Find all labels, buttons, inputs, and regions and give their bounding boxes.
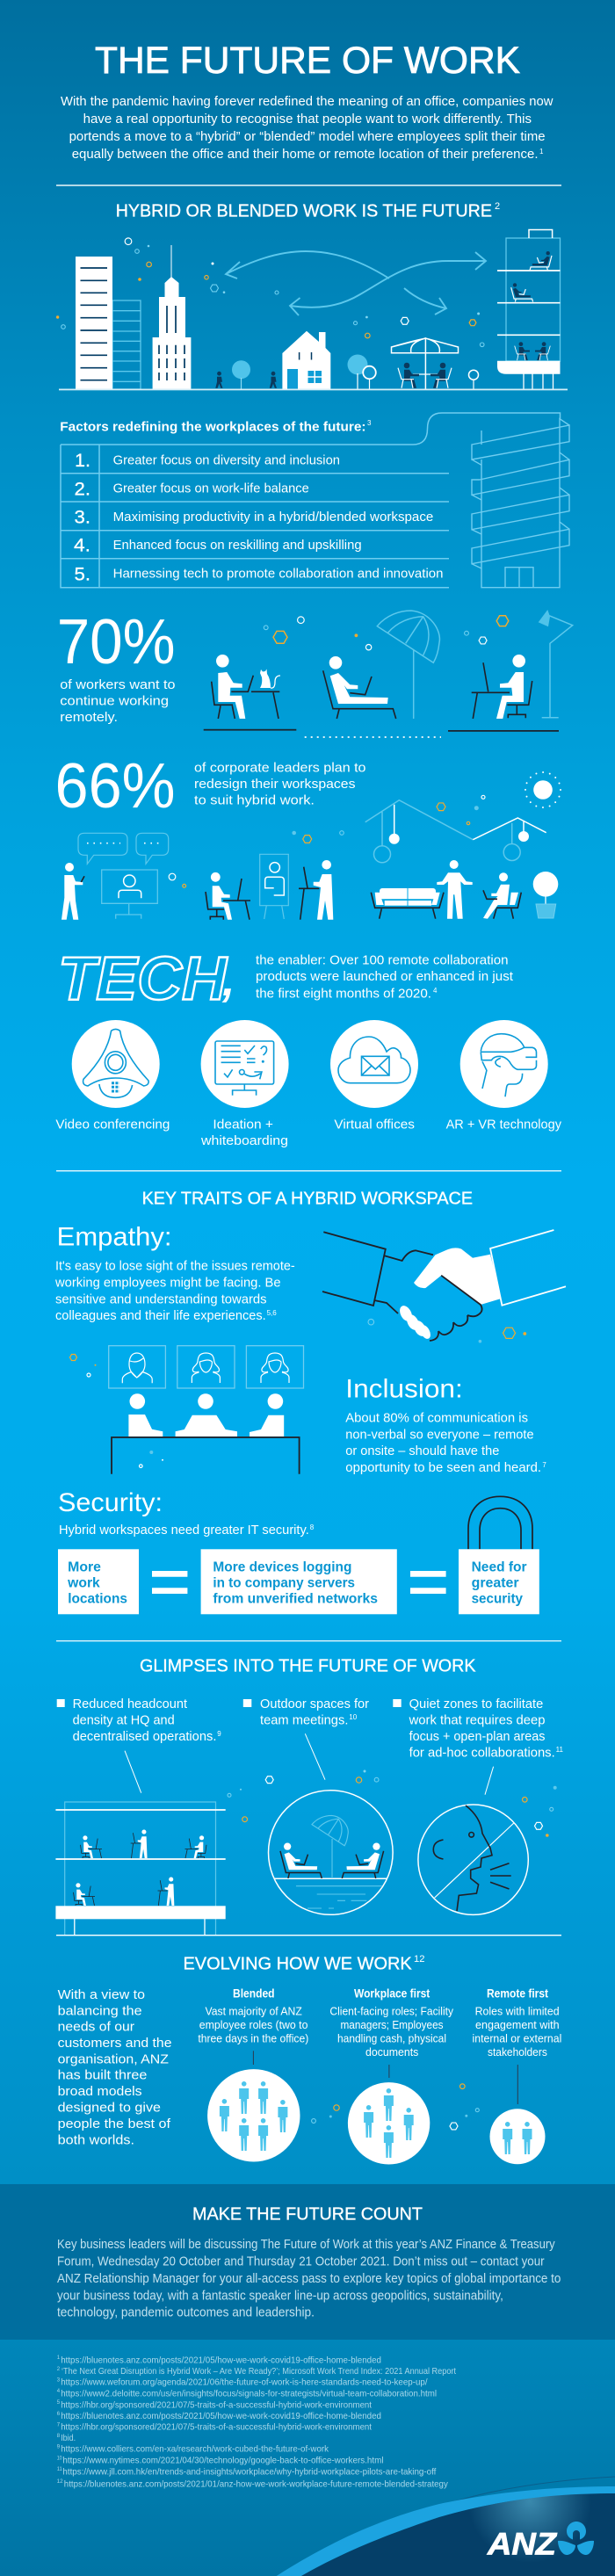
heading: hybrid or blended work: 2 <box>495 201 500 212</box>
text: empathy: Empathy: <box>57 1223 172 1252</box>
text: inclusion: opportunity to be seen and heard. <box>345 1460 541 1475</box>
bullet: outdoor spaces: Outdoor spaces for <box>260 1697 369 1711</box>
footnotes: 12 <box>57 2479 63 2485</box>
text: intro to models: organisation, ANZ <box>58 2051 169 2066</box>
illustration: redesigned workspace <box>62 772 561 920</box>
equals sign <box>410 1571 446 1594</box>
factor 3: 3. <box>74 508 90 528</box>
box: need for greater security: Need for <box>472 1560 527 1575</box>
text: intro to models: designed to give <box>58 2101 161 2116</box>
factor 4: Enhanced focus on reskilling and upskilling <box>113 538 362 553</box>
bullet: reduced headcount: 9 <box>217 1730 221 1738</box>
illustration: outdoor meeting circle <box>269 1791 393 1914</box>
tech heading word: TECH <box>58 944 228 1013</box>
text: empathy <box>54 1223 295 1323</box>
footnotes: https://hbr.org/sponsored/2021/07/5-traits-of-a-successful-hybrid-work-environment <box>61 2399 372 2410</box>
model: remote first: Remote first <box>487 1986 548 2000</box>
panel: factors <box>60 413 569 588</box>
speech bubbles <box>78 833 169 864</box>
box: more devices <box>201 1549 397 1614</box>
model: workplace first: Workplace first <box>354 1986 430 2000</box>
seated person <box>206 872 250 920</box>
heading: key traits: KEY TRAITS OF A HYBRID WORKSPACE <box>142 1190 473 1209</box>
footnotes: ‘The Next Great Disruption is Hybrid Work – Are We Ready?’; Microsoft Work Trend Index: 2021 Annual Report <box>62 2366 456 2377</box>
footnotes: 1 <box>57 2355 61 2361</box>
factor 2: 2. <box>74 479 90 499</box>
person with phone <box>62 863 84 920</box>
seated person with laptop <box>483 872 521 919</box>
box: more work locations <box>58 1549 139 1614</box>
stat: 70%: continue working <box>60 694 169 709</box>
worker on lounger <box>323 611 439 719</box>
model: remote first: internal or external <box>473 2032 561 2045</box>
bullet: outdoor spaces: 10 <box>349 1713 358 1721</box>
particles <box>264 616 509 650</box>
factor 3: Maximising productivity in a hybrid/blended workspace <box>113 510 433 525</box>
icon labels <box>55 1117 561 1148</box>
arrows <box>226 251 486 315</box>
bullet: quiet zones <box>393 1697 563 1760</box>
factor 5: 5. <box>74 564 90 584</box>
text: intro to models: people the best of <box>58 2117 171 2131</box>
office block <box>76 257 141 389</box>
intro text block <box>61 94 554 162</box>
bullet: reduced headcount: Reduced headcount <box>73 1697 188 1711</box>
factors heading: 3 <box>367 419 372 427</box>
particles <box>169 795 485 887</box>
model: remote first: Roles with limited <box>475 2004 560 2017</box>
illustration: inclusive meeting <box>70 1346 304 1474</box>
worker with lamp <box>472 610 573 719</box>
text: inclusion <box>345 1375 546 1475</box>
intro text block: 1 <box>539 148 544 156</box>
worker with cat <box>212 655 280 719</box>
spiral building <box>472 419 569 588</box>
particles <box>312 2084 479 2130</box>
footer background <box>0 2340 615 2576</box>
factor 4 <box>74 536 362 556</box>
text: security: Hybrid workspaces need greater IT security. <box>59 1523 309 1538</box>
stat: 66%: of corporate leaders plan to <box>194 760 365 775</box>
box: more work locations: locations <box>68 1591 127 1606</box>
factors table lines <box>61 413 561 588</box>
house <box>282 331 330 389</box>
factor 2 <box>74 479 309 499</box>
text: intro to models: With a view to <box>58 1987 145 2002</box>
footnotes: 7 <box>57 2423 61 2428</box>
text: empathy: colleagues and their life experiences. <box>55 1308 266 1323</box>
couch <box>371 888 444 919</box>
panel paragraph: technology, pandemic outcomes and leadership. <box>57 2306 315 2320</box>
stat: 70%: 70% <box>57 607 176 677</box>
factor 1: Greater focus on diversity and inclusion <box>113 452 340 467</box>
text: security <box>58 1488 315 1538</box>
text: intro to models: customers and the <box>58 2036 171 2051</box>
intro text block: portends a move to a “hybrid” or “blended” model where employees split their time <box>69 129 546 144</box>
bullet: quiet zones: Quiet zones to facilitate <box>409 1697 543 1711</box>
factors heading: Factors redefining the workplaces of the future: <box>60 420 366 435</box>
panel paragraph: Forum, Wednesday 20 October and Thursday 21 October 2021. Don’t miss out – contact your <box>57 2254 545 2268</box>
intro text block: have a real opportunity to recognise that people want to work differently. This <box>83 112 532 127</box>
text: intro to models <box>58 1987 171 2147</box>
text: empathy: sensitive and understanding towards <box>55 1292 267 1306</box>
box: more work locations: work <box>67 1576 100 1591</box>
icon: whiteboard <box>201 1020 289 1108</box>
model: remote first: stakeholders <box>488 2045 547 2059</box>
meeting participants <box>128 1393 284 1436</box>
footnotes: https://www.jll.com.hk/en/trends-and-insights/workplace/why-hybrid-workplace-pilots-are-taking-off <box>62 2466 436 2477</box>
footnotes: 2 <box>57 2367 61 2372</box>
footnotes: https://bluenotes.anz.com/posts/2021/01/anz-how-we-work-workplace-future-remote-blended-strategy <box>64 2479 448 2490</box>
pointer lines <box>125 1733 494 1795</box>
model: remote first <box>473 1986 561 2164</box>
text: intro to models: broad models <box>58 2084 142 2099</box>
factor 1 <box>75 451 340 471</box>
bullet: outdoor spaces <box>243 1697 369 1728</box>
tech text: the first eight months of 2020. <box>256 987 431 1002</box>
stat: 66% <box>54 751 365 821</box>
footnotes: https://hbr.org/sponsored/2021/07/5-traits-of-a-successful-hybrid-work-environment <box>61 2422 372 2433</box>
icon: handshake <box>322 1230 566 1342</box>
box: more devices: More devices logging <box>213 1560 351 1575</box>
title: THE FUTURE OF WORK <box>95 40 520 82</box>
illustration: quiet zone circle <box>418 1805 528 1914</box>
heading: evolving: EVOLVING HOW WE WORK <box>183 1955 412 1974</box>
text: security: 8 <box>310 1523 315 1531</box>
swoosh <box>277 2477 615 2576</box>
footnotes <box>57 2355 456 2490</box>
footnotes: https://www.weforum.org/agenda/2021/06/the-future-of-work-is-here-standards-need-to-keep-up/ <box>61 2377 428 2388</box>
factor 4: 4. <box>74 536 90 556</box>
box: need for greater security: greater <box>472 1576 519 1591</box>
footnotes: 4 <box>57 2389 61 2394</box>
box: more work locations: More <box>68 1560 101 1575</box>
tech text <box>256 952 514 1002</box>
logo: ANZ: ANZ <box>487 2527 558 2561</box>
footnotes: 3 <box>57 2377 61 2383</box>
text: empathy: 5,6 <box>267 1309 277 1317</box>
panel paragraph: ANZ Relationship Manager for your all-access pass to explore key topics of global importance to <box>57 2272 561 2286</box>
floor lines <box>204 729 559 737</box>
intro text block: With the pandemic having forever redefined the meaning of an office, companies now <box>61 94 554 109</box>
panel paragraph: Key business leaders will be discussing The Future of Work at this year’s ANZ Finance & Treasury <box>57 2238 555 2252</box>
footnotes: https://bluenotes.anz.com/posts/2021/05/how-we-work-covid19-office-home-blended <box>61 2355 381 2365</box>
model: blended: Blended <box>233 1986 274 2000</box>
stat: 66%: 66% <box>54 751 176 821</box>
text: intro to models: has built three <box>58 2068 147 2083</box>
bullet: outdoor spaces: team meetings. <box>260 1713 348 1728</box>
standing person at desk <box>299 860 333 920</box>
stat: 70%: of workers want to <box>60 677 176 692</box>
particles <box>228 1769 557 1837</box>
icon labels: Video conferencing <box>55 1117 170 1132</box>
model: remote first: engagement with <box>475 2018 560 2031</box>
footnotes: Ibid. <box>61 2433 76 2443</box>
text: security: Security: <box>58 1488 163 1517</box>
intro text block: equally between the office and their home or remote location of their preference. <box>72 147 538 162</box>
bullet: reduced headcount <box>57 1697 221 1744</box>
hexagon particles <box>56 238 484 347</box>
text: intro to models: both worlds. <box>58 2132 134 2147</box>
footnotes: 10 <box>57 2457 62 2462</box>
icon: video conferencing <box>72 1020 160 1108</box>
security equation <box>58 1549 539 1614</box>
tech text: the enabler: Over 100 remote collaboration <box>256 952 509 967</box>
text: inclusion: About 80% of communication is <box>345 1410 528 1425</box>
panel paragraph <box>57 2238 561 2320</box>
panel paragraph: your business today, with a fantastic speaker line-up across geopolitics, sustainability, <box>57 2289 503 2303</box>
logo: ANZ <box>487 2522 594 2561</box>
remote avatars <box>122 1353 289 1383</box>
model: workplace first: documents <box>365 2045 419 2059</box>
footnotes: https://bluenotes.anz.com/posts/2021/05/how-we-work-covid19-office-home-blended <box>61 2411 381 2421</box>
icon labels: AR + VR technology <box>446 1117 561 1132</box>
footnotes: 11 <box>57 2467 62 2472</box>
text: inclusion: Inclusion: <box>345 1375 463 1404</box>
heading: hybrid or blended work: HYBRID OR BLENDED WORK IS THE FUTURE <box>116 202 492 221</box>
factor 3 <box>74 508 433 528</box>
box: need for greater security <box>459 1549 539 1614</box>
factor 1: 1. <box>75 451 90 471</box>
ground <box>59 388 568 390</box>
table <box>112 1437 300 1474</box>
text: intro to models: needs of our <box>58 2020 134 2035</box>
model: blended <box>198 1986 308 2161</box>
icon: VR headset <box>460 1020 548 1108</box>
particles <box>70 1355 163 1467</box>
footnotes: 8 <box>57 2434 61 2439</box>
icon labels: Virtual offices <box>334 1117 415 1132</box>
text: intro to models: balancing the <box>58 2003 142 2018</box>
icon labels: whiteboarding <box>200 1133 288 1148</box>
stat: 66%: to suit hybrid work. <box>194 792 315 807</box>
tech heading word: , <box>221 955 235 1006</box>
apartment tower <box>497 230 561 389</box>
footnotes: 6 <box>57 2412 61 2417</box>
panel heading: MAKE THE FUTURE COUNT <box>192 2205 423 2225</box>
bullet: reduced headcount: decentralised operations. <box>73 1729 216 1744</box>
bullet: reduced headcount: density at HQ and <box>73 1713 175 1728</box>
potted plant <box>533 872 558 918</box>
box: more devices: in to company servers <box>213 1576 355 1591</box>
skyscraper <box>153 245 191 389</box>
model: workplace first <box>329 1986 453 2165</box>
text: empathy: working employees might be facing. Be <box>54 1276 281 1291</box>
footnotes: https://www.colliers.com/en-xa/research/work-cubed-the-future-of-work <box>61 2444 329 2455</box>
standing person <box>437 860 473 919</box>
stat: 70%: remotely. <box>60 710 118 725</box>
logo mark <box>558 2522 594 2555</box>
screens <box>109 1346 304 1388</box>
heading: glimpses: GLIMPSES INTO THE FUTURE OF WORK <box>140 1657 476 1676</box>
bullet: quiet zones: work that requires deep <box>409 1713 545 1728</box>
heading: evolving: 12 <box>414 1954 425 1965</box>
roof and lamps <box>365 800 546 863</box>
model: workplace first: managers; Employees <box>341 2018 444 2031</box>
text: inclusion: or onsite – should have the <box>345 1444 499 1458</box>
stat: 66%: redesign their workspaces <box>194 777 355 792</box>
illustration: low density office <box>55 1802 226 1936</box>
bullet: quiet zones: focus + open-plan areas <box>409 1729 545 1744</box>
box: more devices: from unverified networks <box>213 1591 378 1606</box>
tech text: products were launched or enhanced in just <box>256 969 514 984</box>
text: inclusion: non-verbal so everyone – remote <box>345 1427 534 1442</box>
walkers <box>215 372 277 388</box>
model: workplace first: handling cash, physical <box>337 2032 446 2045</box>
footnotes: 5 <box>57 2400 61 2406</box>
bullet: quiet zones: for ad-hoc collaborations. <box>409 1745 555 1760</box>
trees <box>232 355 478 389</box>
icon: padlock <box>468 1496 532 1549</box>
model: blended: three days in the office) <box>198 2032 308 2045</box>
footnotes: 9 <box>57 2444 61 2449</box>
factor 5 <box>74 564 443 584</box>
panel: make the future count <box>0 2184 615 2340</box>
model: blended: Vast majority of ANZ <box>206 2004 302 2017</box>
text: empathy: It's easy to lose sight of the issues remote- <box>55 1259 295 1274</box>
footnotes: https://www.nytimes.com/2021/04/30/technology/google-back-to-office-workers.html <box>62 2456 384 2466</box>
factor 2: Greater focus on work-life balance <box>113 481 309 496</box>
model: workplace first: Client-facing roles; Facility <box>329 2004 453 2017</box>
parasol table <box>392 338 459 389</box>
sun <box>525 772 561 807</box>
model: blended: employee roles (two to <box>199 2018 308 2031</box>
icon: cloud envelope <box>330 1020 418 1108</box>
stat: 70% <box>57 607 176 725</box>
icon labels: Ideation + <box>213 1117 273 1132</box>
footnotes: https://www2.deloitte.com/us/en/insights/focus/signals-for-strategists/virtual-team-collaboration.html <box>61 2388 437 2399</box>
illustration: city and commuting <box>56 230 568 390</box>
flipchart <box>260 854 288 919</box>
box: need for greater security: security <box>472 1591 523 1606</box>
video monitor <box>102 870 157 919</box>
equals sign <box>152 1571 187 1594</box>
tech text: 4 <box>433 987 438 995</box>
bullet: quiet zones: 11 <box>556 1746 563 1754</box>
factor 5: Harnessing tech to promote collaboration and innovation <box>113 566 443 581</box>
text: inclusion: 7 <box>542 1461 546 1469</box>
illustration: remote workers <box>204 610 573 737</box>
